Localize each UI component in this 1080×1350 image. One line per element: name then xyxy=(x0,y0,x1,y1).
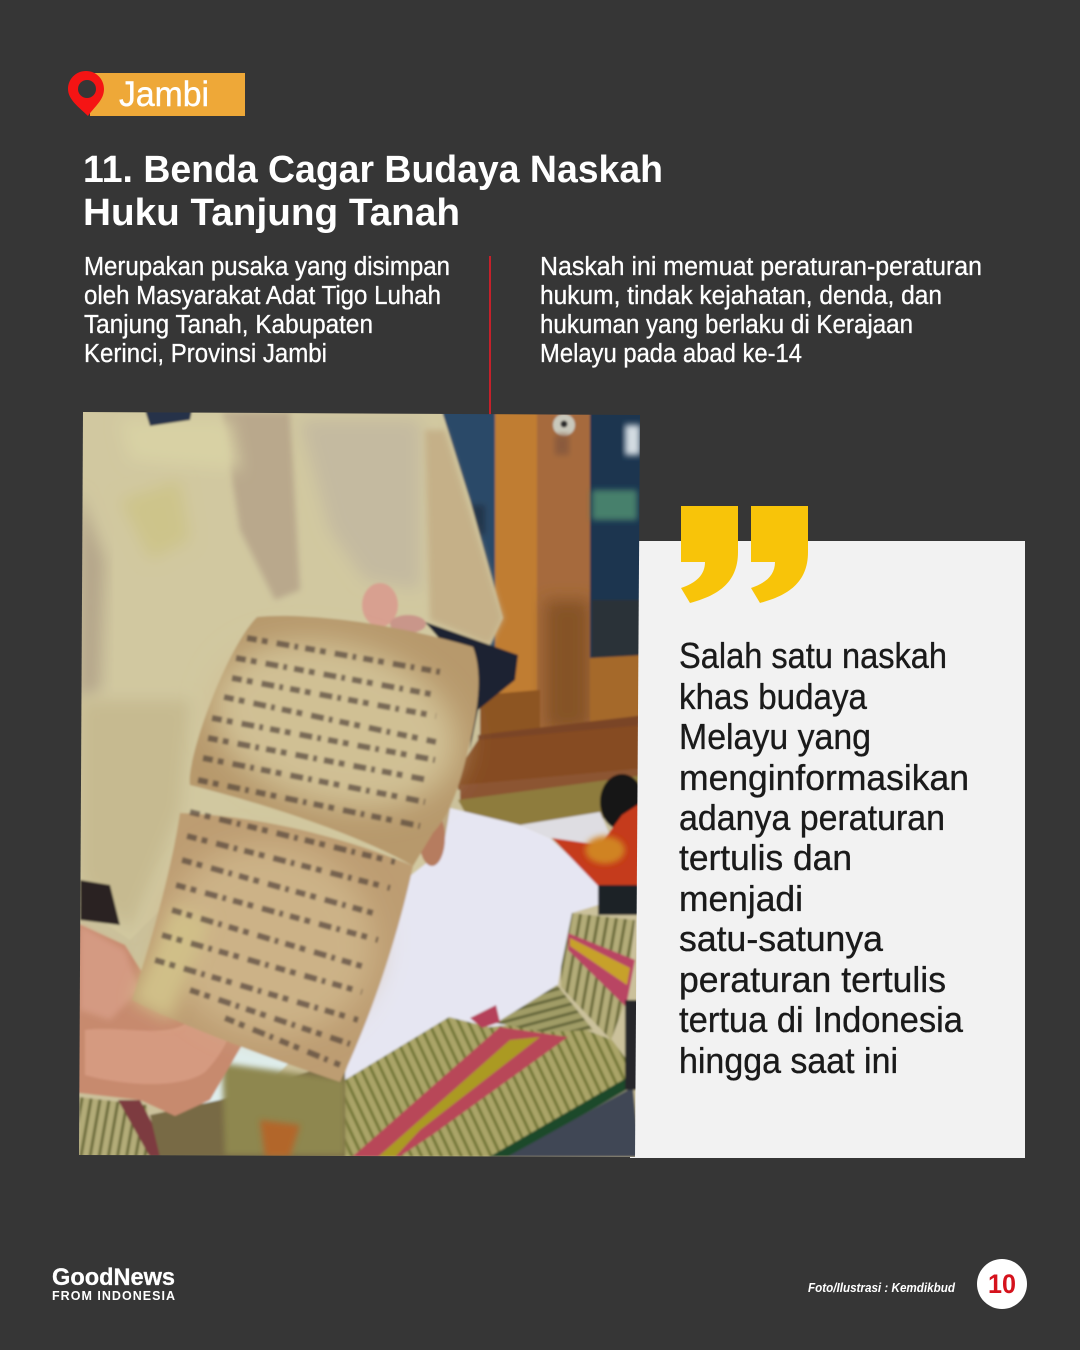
batik cloth and dark bundle xyxy=(552,774,645,915)
footer logo: FROM INDONESIA xyxy=(52,1289,175,1303)
panel: quote card xyxy=(630,541,1025,1158)
patterned sash xyxy=(79,913,640,1157)
text block: right description: hukuman yang berlaku di Kerajaan xyxy=(540,311,913,339)
title xyxy=(83,149,663,234)
text block: left description: Merupakan pusaka yang disimpan xyxy=(84,253,450,281)
footer logo xyxy=(52,1264,175,1303)
page number: 10 xyxy=(988,1269,1016,1299)
title: 11. Benda Cagar Budaya Naskah xyxy=(83,149,663,191)
icon: quotation marks xyxy=(681,506,808,603)
manuscript upper page xyxy=(190,615,479,866)
photo credit: Foto/Ilustrasi : Kemdikbud xyxy=(808,1281,955,1295)
title: Huku Tanjung Tanah xyxy=(83,192,460,234)
manuscript script lines xyxy=(155,638,440,1065)
quote text: khas budaya xyxy=(679,676,868,717)
text block: right description: Naskah ini memuat peraturan-peraturan xyxy=(540,253,982,281)
page number xyxy=(977,1259,1027,1309)
quote text: tertulis dan xyxy=(679,837,852,878)
text block: left description xyxy=(84,253,450,368)
text block: left description: oleh Masyarakat Adat Tigo Luhah xyxy=(84,282,441,310)
text block: right description: hukum, tindak kejahatan, denda, dan xyxy=(540,282,942,310)
quote text: adanya peraturan xyxy=(679,797,945,838)
quote text: hingga saat ini xyxy=(679,1040,898,1081)
cream garment xyxy=(70,405,518,940)
text block: left description: Tanjung Tanah, Kabupaten xyxy=(84,311,373,339)
white cloth xyxy=(197,808,612,1105)
quote text: peraturan tertulis xyxy=(679,959,946,1000)
text block: left description: Kerinci, Provinsi Jambi xyxy=(84,340,327,368)
text block: right description xyxy=(540,253,982,368)
quote text xyxy=(679,635,969,1081)
tag label: Jambi xyxy=(119,75,209,114)
text block: right description: Melayu pada abad ke-14 xyxy=(540,340,802,368)
wooden cabinet background xyxy=(440,405,645,830)
quote text: satu-satunya xyxy=(679,918,884,959)
footer logo: GoodNews xyxy=(52,1264,175,1291)
thumb and fingers xyxy=(70,583,445,1116)
photo: manuscript held in hands xyxy=(70,405,650,1165)
quote text: menjadi xyxy=(679,878,803,919)
icon: location pin xyxy=(68,71,104,116)
quote text: tertua di Indonesia xyxy=(679,999,964,1040)
quote text: menginformasikan xyxy=(679,757,969,798)
manuscript lower page xyxy=(132,813,413,1082)
quote text: Salah satu naskah xyxy=(679,635,947,676)
quote text: Melayu yang xyxy=(679,716,871,757)
location tag: Jambi xyxy=(68,71,245,116)
